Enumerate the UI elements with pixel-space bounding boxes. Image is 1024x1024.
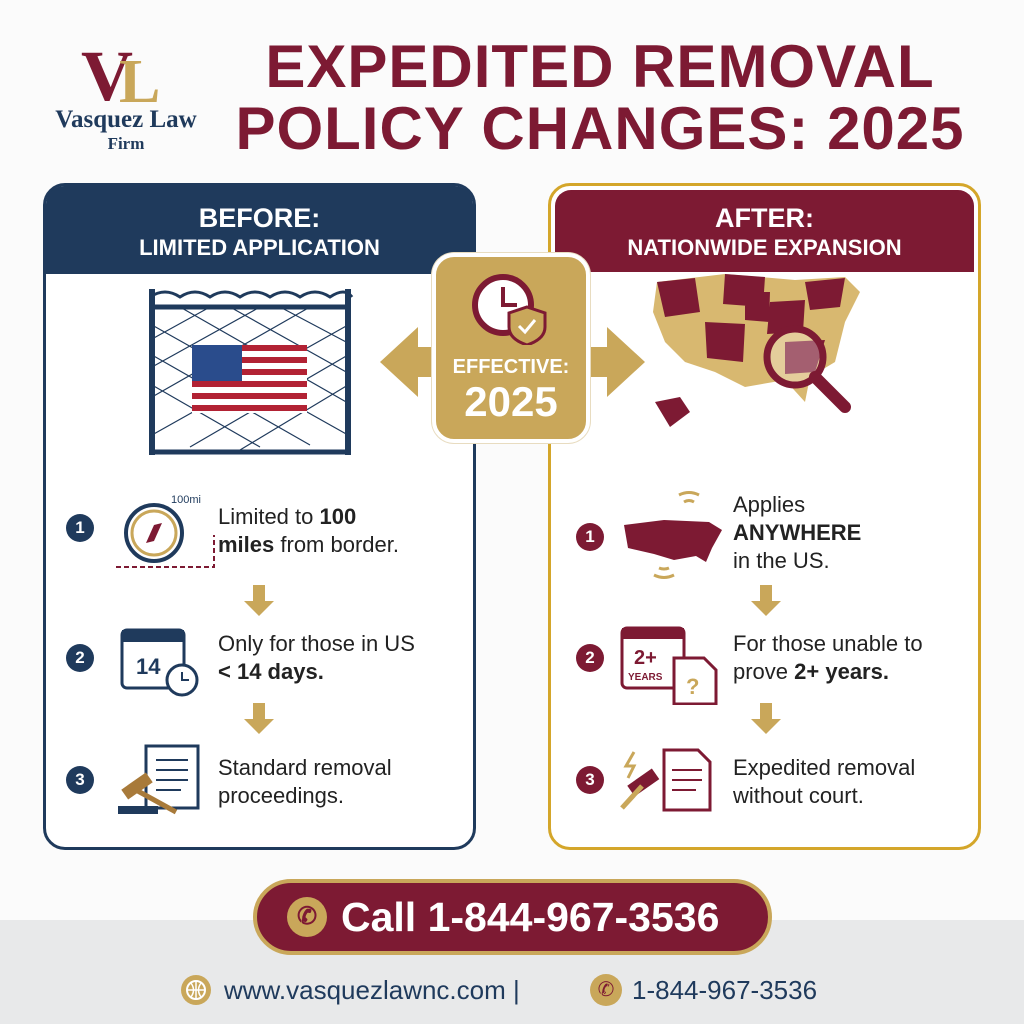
item 2 before: Only for those in US < 14 days. — [218, 631, 415, 684]
arrow — [244, 585, 274, 616]
header: before: BEFORE: — [199, 203, 320, 233]
panel: before — [43, 183, 476, 850]
call button — [253, 879, 772, 955]
logo: Firm — [108, 134, 144, 153]
item 1 before: 1 — [75, 518, 85, 537]
item 3 before: 3 — [75, 770, 85, 789]
title: POLICY CHANGES: 2025 — [235, 95, 965, 162]
arrow — [751, 585, 781, 616]
item 2 before: 14 — [136, 654, 161, 679]
item 1 after: Applies — [733, 492, 805, 517]
footer band — [0, 920, 1024, 1024]
header: after: AFTER: — [715, 203, 814, 233]
icon: globe — [181, 975, 211, 1005]
item 1 before — [66, 495, 399, 568]
illustration: border fence — [149, 289, 354, 455]
header: before — [46, 186, 473, 274]
item 2 after: YEARS — [628, 672, 663, 683]
header: after — [555, 190, 974, 272]
item 1 after: 1 — [585, 527, 595, 546]
item 3 after: 3 — [585, 770, 595, 789]
badge: effective 2025 — [432, 253, 590, 443]
badge: effective 2025: EFFECTIVE: — [453, 356, 569, 378]
logo: Vasquez Law — [55, 106, 197, 133]
item 3 after — [576, 748, 915, 812]
footer contact: www.vasquezlawnc.com | — [224, 975, 520, 1005]
item 3 before — [66, 744, 392, 814]
icon: phone: ✆ — [297, 903, 317, 930]
item 3 before: Standard removal proceedings. — [218, 755, 392, 808]
item 2 after: For those unable to prove 2+ years. — [733, 631, 923, 684]
item 2 after: 2 — [585, 648, 595, 667]
logo — [55, 40, 197, 153]
item 2 after: ? — [686, 674, 699, 699]
icon: phone — [287, 897, 327, 937]
item 1 after: in the US. — [733, 548, 830, 573]
item 1 after: ANYWHERE — [733, 520, 861, 545]
arrows: center double arrow — [380, 327, 645, 397]
footer contact: 1-844-967-3536 — [632, 975, 817, 1005]
call button: Call 1-844-967-3536 — [341, 894, 719, 940]
icon: phone small — [590, 974, 622, 1006]
illustration: US map with magnifier — [653, 274, 860, 427]
item 2 before — [66, 628, 415, 696]
header: after: NATIONWIDE EXPANSION — [627, 235, 902, 260]
icon: phone small: ✆ — [598, 979, 614, 1001]
item 2 after — [576, 626, 923, 705]
title: EXPEDITED REMOVAL — [265, 33, 935, 100]
badge: effective 2025: 2025 — [464, 378, 558, 425]
item 2 after: 2+ — [634, 647, 657, 669]
arrow — [751, 703, 781, 734]
icon: clock shield — [472, 274, 546, 345]
title — [235, 33, 965, 162]
item 3 after: Expedited removal without court. — [733, 755, 915, 808]
item 2 before: 2 — [75, 648, 85, 667]
item 1 after — [576, 491, 861, 579]
footer contact — [181, 974, 817, 1006]
header: before: LIMITED APPLICATION — [139, 235, 380, 260]
item 1 before: Limited to 100 miles from border. — [218, 504, 399, 557]
panel: after — [548, 183, 981, 850]
arrow — [244, 703, 274, 734]
